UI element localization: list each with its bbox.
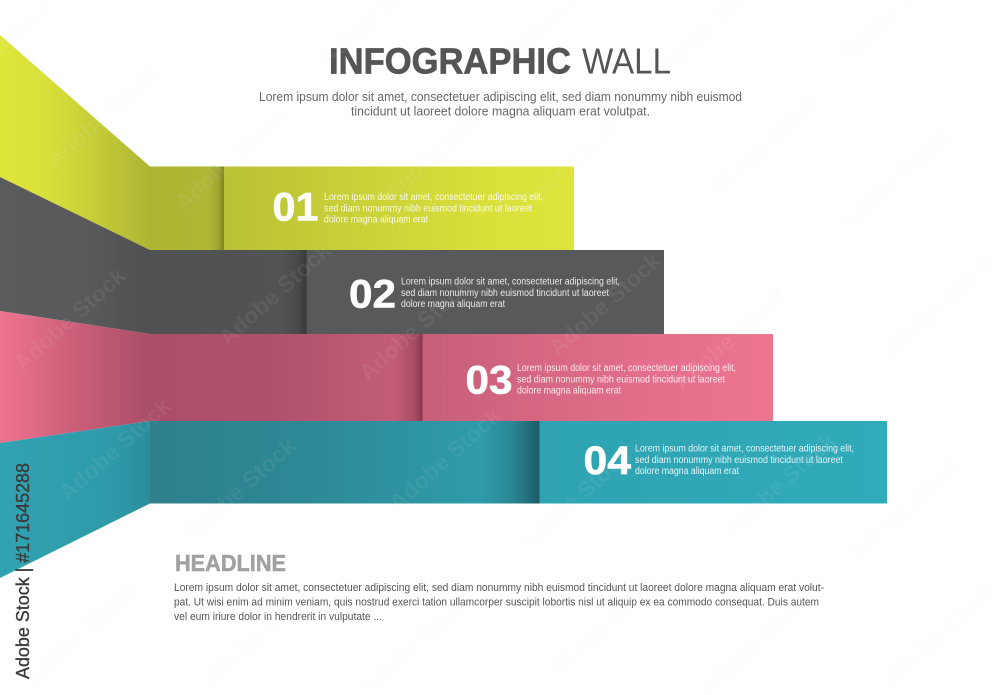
step 03 text: Lorem ipsum dolor sit amet, consectetuer adipiscing elit, [517,363,736,374]
step 04 text [635,444,854,477]
step 01 text [324,192,543,226]
step 03 text [517,363,736,397]
watermark: Adobe Stock [54,392,176,506]
panel: step 02 gray wall band [0,177,664,334]
step 04 text: Lorem ipsum dolor sit amet, consectetuer adipiscing elit, [635,444,854,454]
stock id side label: Adobe Stock | #171645288 [12,463,33,679]
watermark: Adobe Stock [719,427,841,541]
watermark: Adobe Stock [669,282,791,396]
watermark: Adobe Stock [170,102,292,216]
step 02 text [401,276,620,310]
step 02 number: 02 [349,272,396,316]
subtitle text: tincidunt ut laoreet dolore magna aliquam erat volutpat. [351,104,650,118]
subtitle text: Lorem ipsum dolor sit amet, consectetuer adipiscing elit, sed diam nonummy nibh euismod [259,90,742,104]
panel: step 04 teal wall band [0,421,887,578]
watermark: Adobe Stock [214,237,336,351]
step 02 text: sed diam nonummy nibh euismod tincidunt ut laoreet [401,288,609,299]
watermark: Adobe Stock [199,577,321,691]
watermark: Adobe Stock [504,112,626,226]
watermark: Adobe Stock [9,262,131,376]
step 04 number: 04 [584,439,632,483]
panel: step 03 pink wall band [0,311,773,443]
watermark: Adobe Stock [544,567,666,681]
step 01 text: dolore magna aliquam erat [324,215,428,226]
watermark: Adobe Stock [384,402,506,516]
step 03 number: 03 [466,358,512,402]
step 02 text: dolore magna aliquam erat [401,299,505,310]
step 02 text: Lorem ipsum dolor sit amet, consectetuer adipiscing elit, [401,276,620,288]
body text [174,582,824,623]
watermark: Adobe Stock [544,247,666,361]
watermark: Adobe Stock [514,442,636,556]
body text: vel eum iriure dolor in hendrerit in vulputate ... [174,611,382,623]
watermark: Adobe Stock [879,577,1000,691]
step 01 number: 01 [272,186,318,230]
watermark: Adobe Stock [179,432,301,546]
watermark: Adobe Stock [354,272,476,386]
title: WALL [582,40,671,82]
watermark: Adobe Stock [834,122,956,236]
headline: HEADLINE [175,550,286,576]
step 01 text: sed diam nonummy nibh euismod tincidunt ut laoreet [324,203,532,214]
watermark: Adobe Stock [42,59,164,173]
body text: pat. Ut wisi enim ad minim veniam, quis nostrud exerci tation ullamcorper suscipit lobortis nisl ut aliquip ex ea commodo consequat. Duis autem [174,596,819,608]
step 04 text: sed diam nonummy nibh euismod tincidunt ut laoreet [635,455,843,466]
subtitle text [259,90,742,118]
step 03 text: sed diam nonummy nibh euismod tincidunt ut laoreet [517,374,725,385]
panel: step 01 yellow wall band [0,35,574,250]
step 01 text: Lorem ipsum dolor sit amet, consectetuer adipiscing elit, [324,192,543,203]
watermark: Adobe Stock [704,87,826,201]
watermark: Adobe Stock [844,452,966,566]
watermark: Adobe Stock [19,577,141,691]
watermark: Adobe Stock [379,92,501,206]
body text: Lorem ipsum dolor sit amet, consectetuer adipiscing elit, sed diam nonummy nibh euismod tincidunt ut laoreet dolore magna aliquam erat volut- [174,582,824,594]
step 03 text: dolore magna aliquam erat [517,386,621,397]
step 04 text: dolore magna aliquam erat [635,466,739,477]
title: INFOGRAPHIC [329,40,571,82]
watermark: Adobe Stock [879,247,1000,361]
